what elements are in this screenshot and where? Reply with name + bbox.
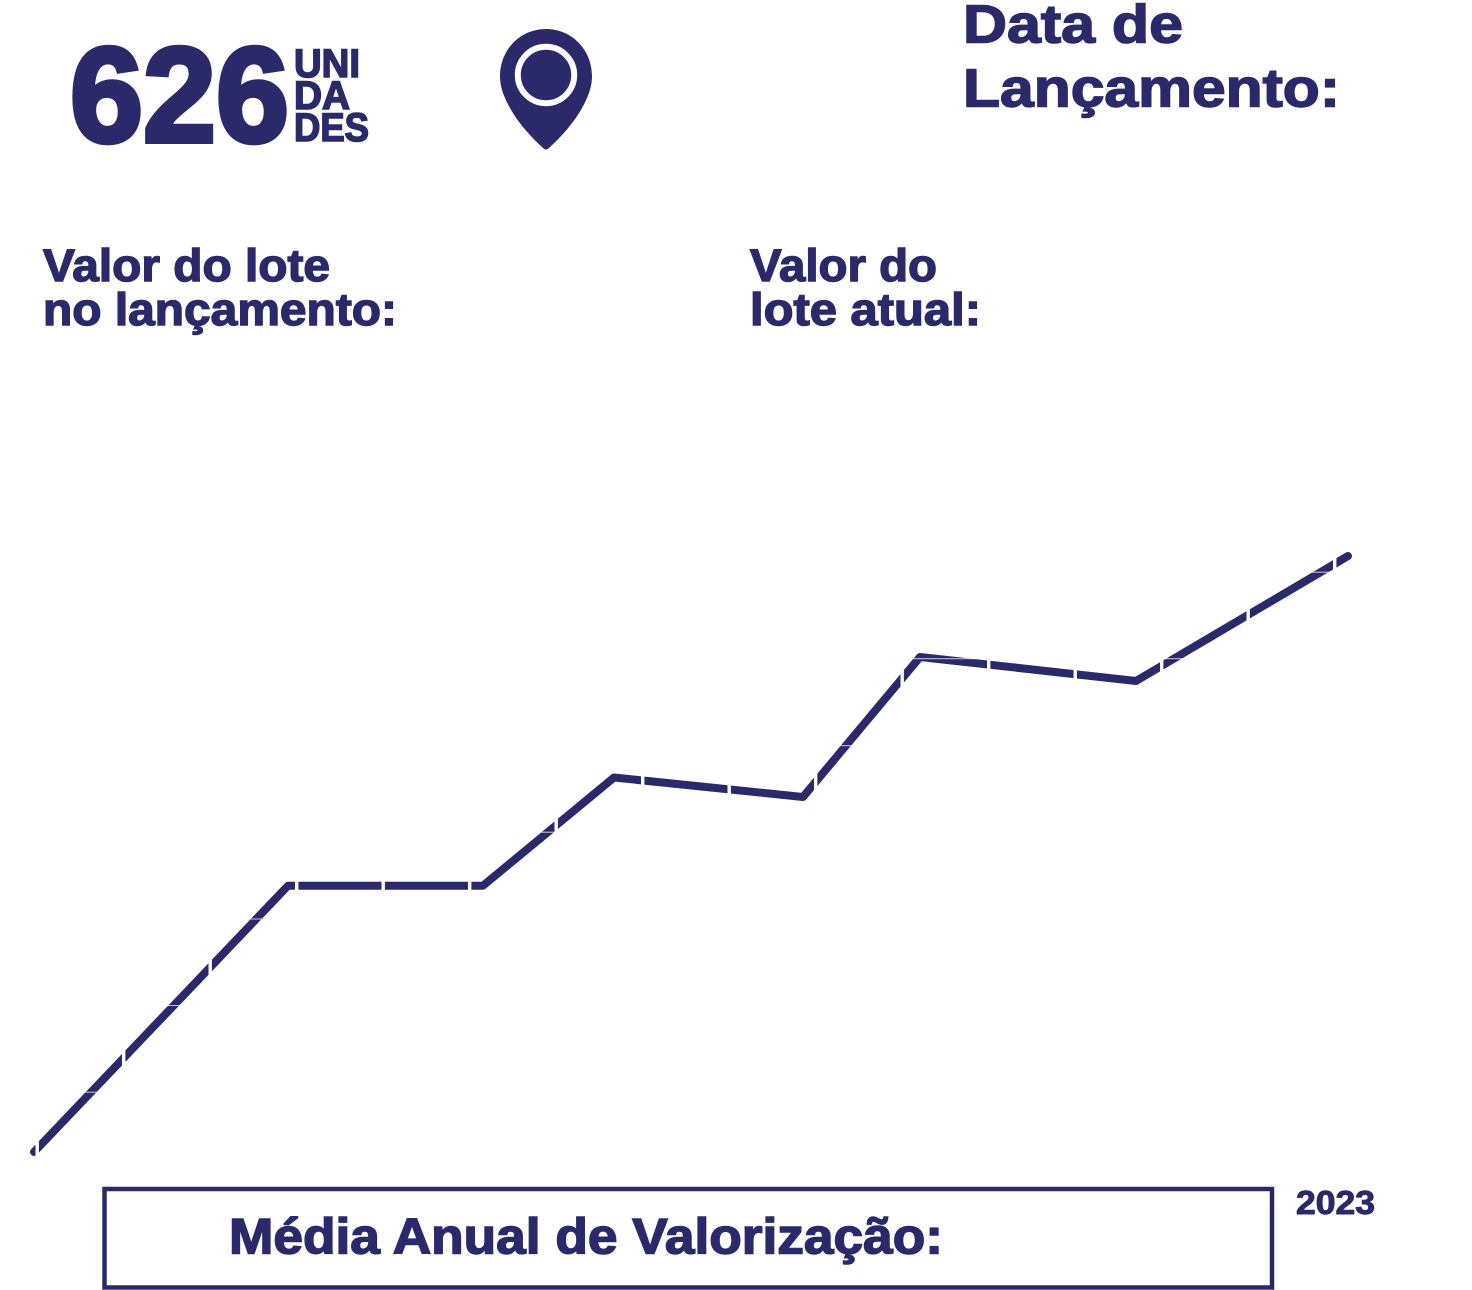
heading: valor do lote no lançamento: no lançamento:	[43, 284, 397, 335]
heading: valor do lote no lançamento	[43, 240, 397, 335]
units count: 626 unidades	[70, 20, 369, 170]
callout label: Média Anual de Valorização:	[229, 1208, 943, 1264]
heading: valor do lote atual	[750, 240, 981, 335]
label: unidades	[294, 42, 369, 150]
year label: 2023: 2023	[1296, 1184, 1375, 1221]
heading: valor do lote no lançamento: Valor do lote	[43, 240, 330, 291]
line chart: valorização	[0, 540, 1472, 1180]
label: unidades: DES	[294, 106, 369, 150]
heading: valor do lote atual: Valor do	[750, 240, 937, 291]
heading: data de lançamento	[963, 0, 1340, 118]
callout box: média anual de valorização	[104, 1189, 1272, 1288]
number 626: 626	[70, 20, 289, 170]
label: unidades: UNI	[294, 42, 360, 86]
icon: location pin	[500, 29, 592, 150]
label: unidades: DA	[294, 74, 350, 118]
heading: valor do lote atual: lote atual:	[750, 284, 981, 335]
heading: data de lançamento: Lançamento:	[963, 58, 1340, 118]
